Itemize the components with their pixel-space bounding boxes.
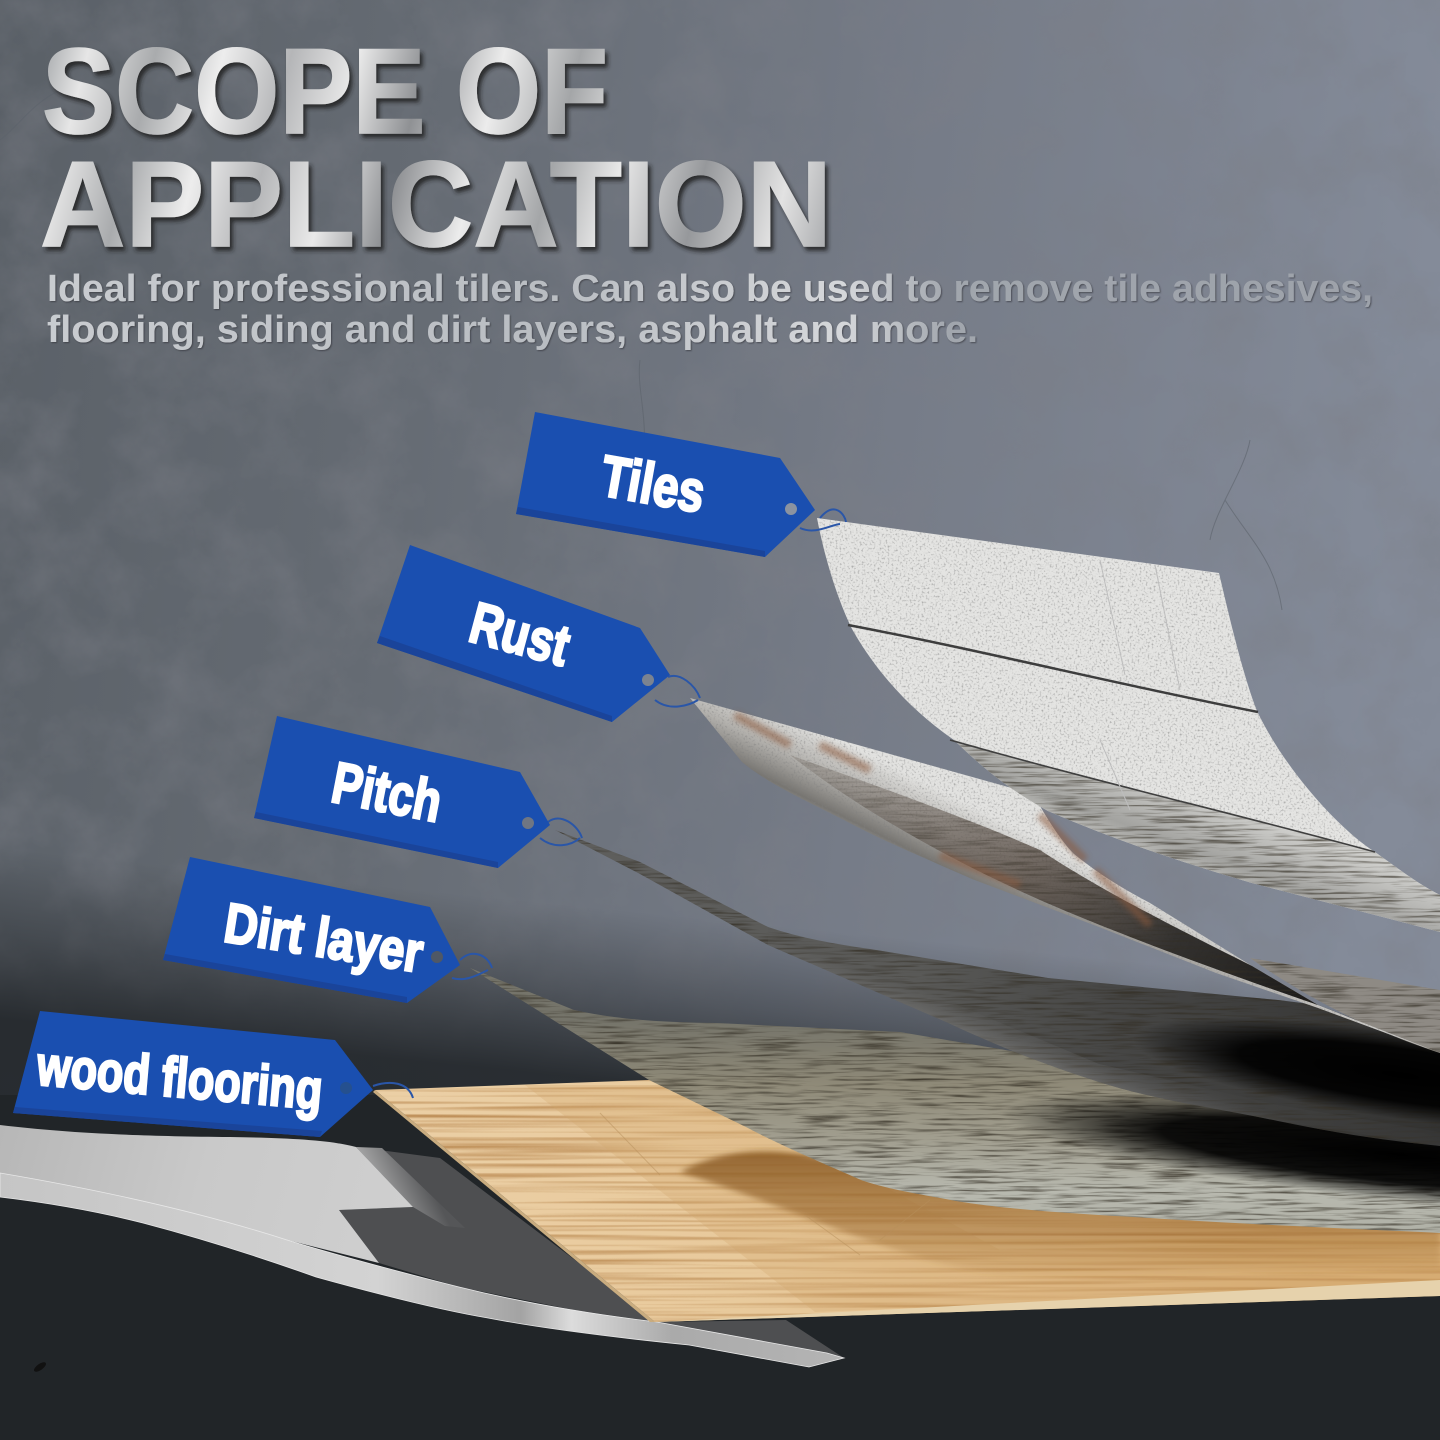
rust sheet (690, 698, 1440, 1053)
wood flooring sheet (373, 1080, 1440, 1322)
tag: Dirt layer (163, 857, 492, 1003)
dirt layer dark shading (997, 1067, 1440, 1243)
subtitle text: Ideal for professional tilers. Can also be used to remove tile adhesives, (47, 268, 1373, 310)
blade light upper face (0, 1125, 413, 1263)
dirt layer sheet (470, 968, 1440, 1243)
wood front edge (655, 1280, 1440, 1322)
tile lower grey strip (954, 740, 1440, 932)
tag: Pitch: Pitch (327, 750, 447, 835)
subtitle text (47, 268, 1373, 351)
wood parquet tone block (525, 1085, 1440, 1312)
tag: Tiles (516, 412, 846, 557)
wood shadow under sheets (680, 1151, 1440, 1275)
pitch sheet light lower edge (768, 927, 1440, 1146)
tile grout lines (848, 625, 1258, 712)
title (40, 23, 832, 272)
title: SCOPE OF (42, 23, 608, 159)
tag: wood flooring: wood flooring (34, 1034, 325, 1121)
tag: Rust: Rust (463, 590, 577, 679)
blade dark inner face (339, 1147, 844, 1358)
title: APPLICATION (40, 136, 832, 272)
rust stains (735, 715, 1150, 925)
tiles sheet (817, 518, 1440, 932)
blade bevelled cutting edge (0, 1173, 844, 1367)
rust sheet dark streak (790, 755, 1318, 1005)
rust sheet far section (1250, 958, 1440, 1053)
tag: Dirt layer: Dirt layer (220, 891, 428, 984)
tag: Pitch (254, 716, 582, 868)
pitch sheet (555, 830, 1440, 1156)
pitch dark shadow (1127, 994, 1440, 1156)
subtitle text: flooring, siding and dirt layers, asphalt and more. (47, 309, 978, 351)
tag: Tiles: Tiles (596, 443, 710, 526)
blade of scraper tool (0, 1125, 844, 1367)
blade mid-grey strip (356, 1147, 465, 1228)
tag: Rust (377, 545, 700, 722)
